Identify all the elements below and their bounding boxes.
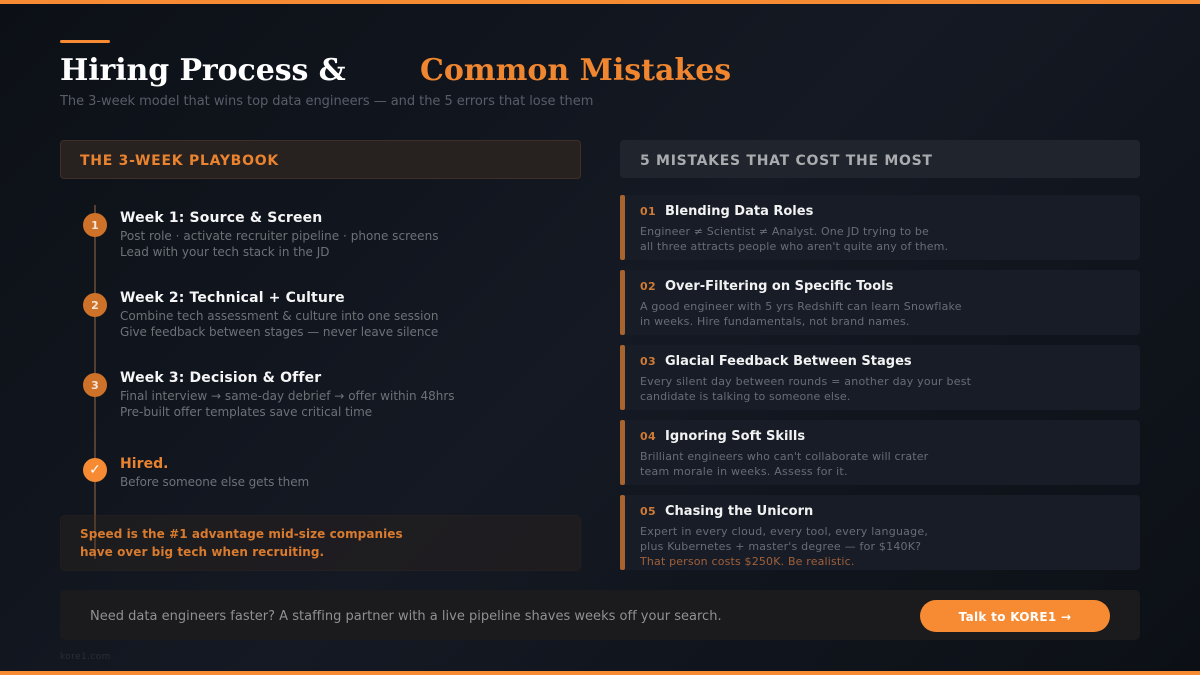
step 2 badge: 2 [91, 299, 99, 312]
step 1 badge: 1 [91, 219, 99, 232]
mistake 05: That person costs $250K. Be realistic. [640, 555, 855, 568]
CTA bar [60, 590, 1140, 640]
step 2 description: Combine tech assessment & culture into one session [120, 309, 438, 323]
mistake 02: Over-Filtering on Specific Tools [665, 279, 893, 294]
mistake 04: Brilliant engineers who can't collaborate will crater [640, 450, 928, 463]
mistake 02: 02 [640, 280, 656, 293]
mistake 01: 01 [640, 205, 656, 218]
hired badge [83, 458, 107, 482]
mistake 02 [620, 270, 1140, 335]
mistakes header: 5 MISTAKES THAT COST THE MOST [640, 153, 933, 169]
speed callout text: Speed is the #1 advantage mid-size companies [80, 527, 403, 541]
mistake 02: in weeks. Hire fundamentals, not brand names. [640, 315, 910, 328]
mistake 04: Ignoring Soft Skills [665, 429, 805, 444]
top accent bar [0, 0, 1200, 4]
step 1 description: Post role · activate recruiter pipeline · phone screens [120, 229, 438, 243]
step 1 description: Lead with your tech stack in the JD [120, 245, 330, 259]
mistake 03 [620, 345, 1140, 410]
mistake 04 [620, 420, 1140, 485]
step 3 description [120, 389, 455, 419]
step 3 description: Pre-built offer templates save critical time [120, 405, 372, 419]
mistake 03: Glacial Feedback Between Stages [665, 354, 912, 369]
title [60, 53, 731, 88]
step 3 badge: 3 [91, 379, 99, 392]
step 1 description [120, 229, 438, 259]
mistake 03: candidate is talking to someone else. [640, 390, 850, 403]
hired description: Before someone else gets them [120, 475, 309, 489]
playbook header: THE 3-WEEK PLAYBOOK [80, 153, 279, 169]
mistake 01: all three attracts people who aren't quite any of them. [640, 240, 948, 253]
step 1 title: Week 1: Source & Screen [120, 210, 322, 226]
mistake 05: Expert in every cloud, every tool, every language, [640, 525, 928, 538]
mistake 05: 05 [640, 505, 656, 518]
CTA button: Talk to KORE1 → [959, 610, 1071, 624]
CTA text: Need data engineers faster? A staffing partner with a live pipeline shaves weeks off your search. [90, 609, 722, 624]
hired badge: ✓ [89, 462, 101, 478]
footer domain: kore1.com [60, 652, 111, 662]
playbook header [60, 140, 581, 179]
CTA button [920, 600, 1110, 632]
mistake 01: Blending Data Roles [665, 204, 813, 219]
timeline line [94, 205, 96, 559]
mistake 03: Every silent day between rounds = another day your best [640, 375, 971, 388]
mistake 05: Chasing the Unicorn [665, 504, 813, 519]
step 2 description [120, 309, 438, 339]
step 3 badge [83, 373, 107, 397]
speed callout text: have over big tech when recruiting. [80, 545, 324, 559]
subtitle: The 3-week model that wins top data engineers — and the 5 errors that lose them [60, 94, 593, 109]
step 2 badge [83, 293, 107, 317]
step 2 title: Week 2: Technical + Culture [120, 290, 345, 306]
mistake 04: 04 [640, 430, 656, 443]
title accent line [60, 40, 110, 43]
mistake 05: plus Kubernetes + master's degree — for $140K? [640, 540, 921, 553]
bottom accent bar [0, 671, 1200, 675]
step 1 badge [83, 213, 107, 237]
mistake 05 [620, 495, 1140, 570]
step 2 description: Give feedback between stages — never leave silence [120, 325, 438, 339]
mistake 03: 03 [640, 355, 656, 368]
panel: playbook [60, 140, 581, 571]
speed callout text [80, 527, 403, 559]
mistake 02: A good engineer with 5 yrs Redshift can learn Snowflake [640, 300, 962, 313]
mistake 04: team morale in weeks. Assess for it. [640, 465, 848, 478]
mistake 01 [620, 195, 1140, 260]
mistake 01: Engineer ≠ Scientist ≠ Analyst. One JD trying to be [640, 225, 929, 238]
title: Hiring Process & [60, 53, 346, 88]
step 3 title: Week 3: Decision & Offer [120, 370, 321, 386]
speed callout [60, 515, 581, 571]
mistakes header [620, 140, 1140, 178]
hired title: Hired. [120, 456, 169, 472]
step 3 description: Final interview → same-day debrief → offer within 48hrs [120, 389, 455, 403]
title: Common Mistakes [420, 53, 731, 88]
